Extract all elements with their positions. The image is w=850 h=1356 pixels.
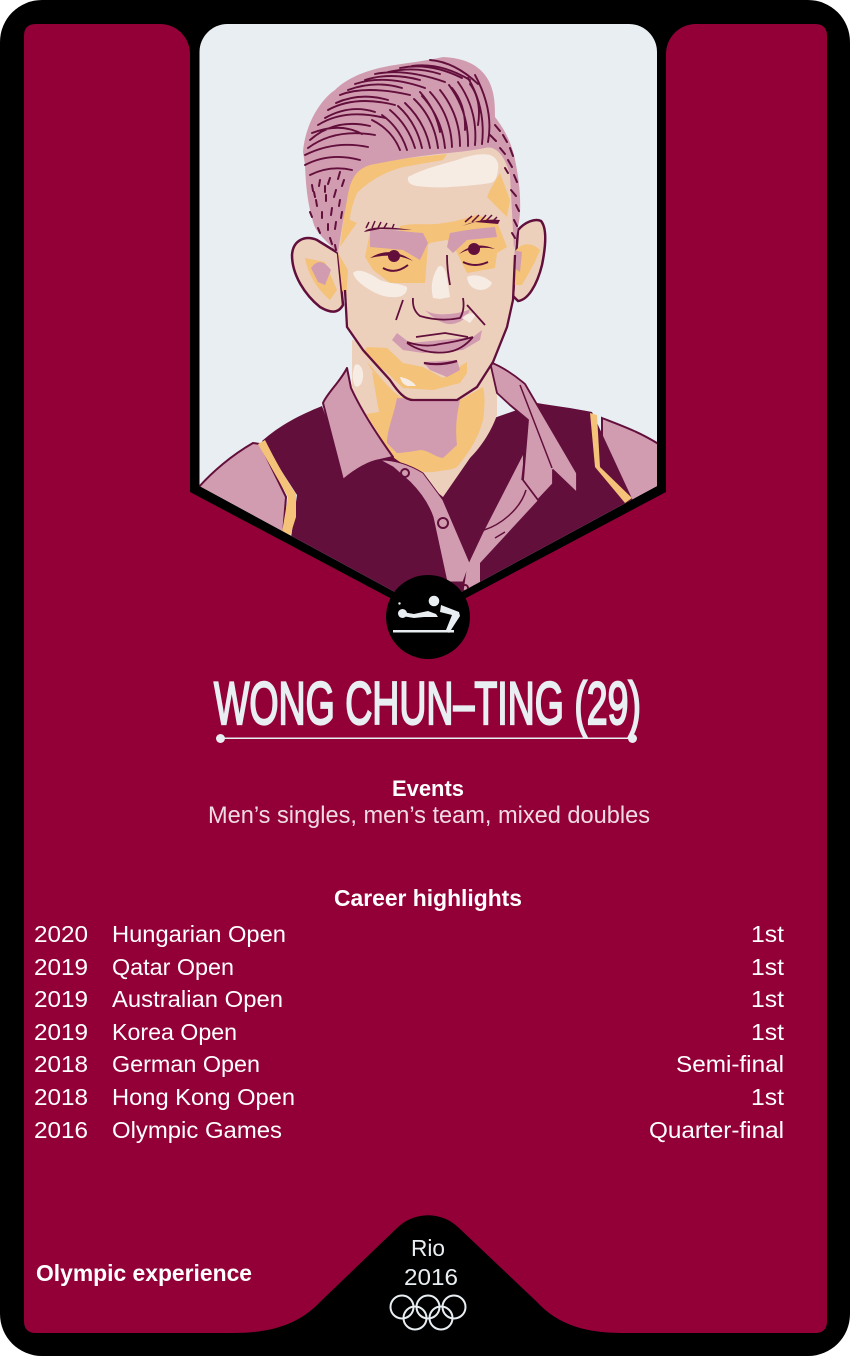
row 2018 German Open: 2018 [34, 1051, 88, 1077]
row 2018 German Open [34, 1051, 784, 1077]
name underline [216, 734, 637, 743]
neck shadow orange left [366, 372, 396, 452]
neck shadow orange [367, 362, 484, 472]
ear details [305, 244, 540, 300]
hair [303, 57, 520, 253]
row 2016 Olympic Games: Olympic Games [112, 1117, 282, 1143]
portrait background [199, 24, 657, 624]
games year: 2016 [404, 1264, 458, 1290]
row 2020 Hungarian Open: 2020 [34, 921, 88, 947]
row 2018 Hong Kong Open: 1st [751, 1084, 785, 1110]
collar right [490, 362, 577, 500]
row 2019 Qatar Open: Qatar Open [112, 954, 234, 980]
row 2019 Australian Open [34, 986, 785, 1012]
ear left [292, 238, 343, 312]
row 2019 Australian Open: 2019 [34, 986, 88, 1012]
icon: table tennis player [393, 596, 460, 633]
row 2019 Korea Open: 1st [751, 1019, 785, 1045]
right shirt front [463, 455, 540, 595]
right sleeve [602, 418, 660, 505]
row 2020 Hungarian Open: 1st [751, 921, 785, 947]
vest [262, 403, 632, 592]
rio city label: Rio [411, 1235, 445, 1261]
hair strands [305, 60, 478, 175]
row 2019 Korea Open: 2019 [34, 1019, 88, 1045]
row 2019 Korea Open: Korea Open [112, 1019, 237, 1045]
row 2019 Australian Open: 1st [751, 986, 785, 1012]
career highlights table [34, 921, 785, 1143]
sleeve stripes [258, 413, 632, 536]
row 2019 Qatar Open: 2019 [34, 954, 88, 980]
row 2016 Olympic Games [34, 1117, 784, 1143]
face shadows orange [340, 154, 447, 247]
nose and mouth lines [396, 255, 485, 353]
face [338, 147, 515, 400]
nose bridge skin [430, 240, 457, 253]
row 2019 Australian Open: Australian Open [112, 986, 283, 1012]
eyebrows [364, 220, 500, 232]
row 2018 Hong Kong Open: 2018 [34, 1084, 88, 1110]
events heading: Events [392, 776, 464, 801]
icon: olympic rings [390, 1296, 466, 1330]
row 2019 Qatar Open [34, 954, 785, 980]
row 2016 Olympic Games: Quarter-final [649, 1117, 784, 1143]
neck shadow pink [387, 398, 460, 458]
collar right inner lines [484, 385, 552, 538]
face pink shading [370, 227, 497, 377]
neck [352, 340, 497, 497]
career highlights heading: Career highlights [334, 885, 522, 911]
shirt placket [380, 460, 470, 582]
events list: Men’s singles, men’s team, mixed doubles [208, 802, 650, 829]
olympic experience label: Olympic experience [36, 1260, 252, 1286]
row 2018 Hong Kong Open [34, 1084, 785, 1110]
hair mass [303, 57, 520, 253]
eyes [370, 245, 495, 261]
left sleeve [200, 442, 287, 532]
badge circle [386, 575, 470, 659]
face highlights [408, 154, 498, 187]
row 2020 Hungarian Open: Hungarian Open [112, 921, 286, 947]
sport badge [386, 575, 470, 659]
portrait [198, 24, 660, 640]
row 2020 Hungarian Open [34, 921, 785, 947]
face outline [345, 255, 515, 400]
row 2018 Hong Kong Open: Hong Kong Open [112, 1084, 295, 1110]
row 2018 German Open: Semi-final [676, 1051, 784, 1077]
row 2016 Olympic Games: 2016 [34, 1117, 88, 1143]
ear right [513, 220, 545, 301]
short side hair ticks [310, 125, 519, 250]
collar left [323, 368, 393, 480]
row 2019 Qatar Open: 1st [751, 954, 785, 980]
buttons [401, 469, 468, 591]
row 2019 Korea Open [34, 1019, 785, 1045]
row 2018 German Open: German Open [112, 1051, 260, 1077]
